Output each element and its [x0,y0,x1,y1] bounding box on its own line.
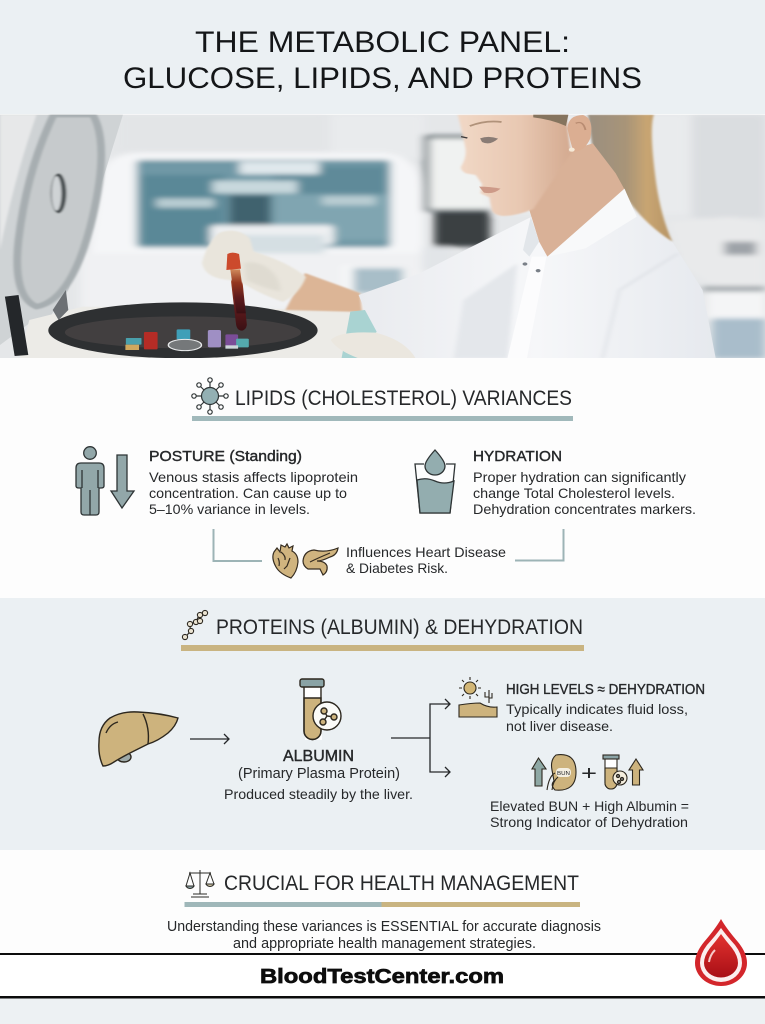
icon: desert sun [459,677,497,717]
text: disease risk: & Diabetes Risk. [346,560,448,576]
icon: BUN plus albumin [532,755,643,790]
icon: heart [273,544,298,578]
title: THE METABOLIC PANEL: [195,26,570,59]
icon: pancreas [303,548,338,575]
icon: protein chain [182,610,208,640]
icon: glass of water with drop [415,450,455,513]
photo: lab technician placing a blood tube in a centrifuge [0,114,765,358]
panel: crucial for health management [167,870,601,952]
bottom band [0,997,765,1024]
text: bun and albumin: Strong Indicator of Dehydration [490,814,688,830]
table [28,307,106,324]
text: hydration: HYDRATION [473,448,562,465]
icon: small tube [603,755,627,789]
text: high levels: not liver disease. [506,718,613,734]
text: high levels [506,682,705,734]
mouth [479,187,501,193]
icon: standing person with down arrow [76,447,134,515]
footer site name: BloodTestCenter.com [260,966,504,988]
text: posture: POSTURE (Standing) [149,448,302,465]
text: disease risk [346,544,506,576]
connector right [515,529,564,560]
heading: proteins: PROTEINS (ALBUMIN) & DEHYDRATION [216,616,583,639]
text: summary: Understanding these variances is ESSENTIAL for accurate diagnosis [167,919,601,935]
hand with glove [202,231,306,302]
icon: liver [99,712,178,766]
heading rule [192,416,573,421]
text: posture: Venous stasis affects lipoprotein [149,469,358,485]
collar [547,189,637,257]
title: GLUCOSE, LIPIDS, AND PROTEINS [123,62,642,95]
blood tube lower [230,279,247,331]
header band [0,0,765,114]
ear [567,115,591,152]
lipids section background [0,358,765,598]
connector left [214,529,262,561]
coat [358,216,716,358]
text: albumin [224,748,413,802]
text: posture: 5–10% variance in levels. [149,501,310,517]
lid [0,115,123,345]
heading rule [181,645,584,651]
text: posture [149,448,358,517]
icon: up arrow tan [629,759,643,785]
band under photo [0,358,765,370]
panel: lipids variances [76,378,696,578]
text: albumin: Produced steadily by the liver. [224,786,413,802]
eye [480,137,498,143]
tube cap and upper tube [230,269,246,313]
text: hydration: Dehydration concentrates markers. [473,501,696,517]
health management section background [0,850,765,954]
proteins section background [0,598,765,850]
text: disease risk: Influences Heart Disease [346,544,506,560]
icon: lipid particle [192,378,228,414]
heading: lipids: LIPIDS (CHOLESTEROL) VARIANCES [235,387,572,410]
plus sign: + [581,763,597,785]
heading: crucial: CRUCIAL FOR HEALTH MANAGEMENT [224,872,579,895]
text: summary: and appropriate health management strategies. [233,936,536,952]
footer [0,919,765,998]
text: summary [167,919,601,952]
heading rule [184,902,580,907]
icon: kidney: BUN [557,771,570,777]
icon: up arrow green [532,758,546,786]
text: bun and albumin: Elevated BUN + High Albumin = [490,798,689,814]
text: high levels: HIGH LEVELS ≈ DEHYDRATION [506,682,705,698]
text: bun and albumin [490,798,689,830]
arm [285,273,362,312]
cloth and lower glove [342,310,377,358]
neck [529,143,624,257]
footer background [0,954,765,997]
hair [588,115,672,242]
text: posture: concentration. Can cause up to [149,485,347,501]
arrow: liver to albumin [190,734,229,744]
face [458,115,571,216]
text: albumin: ALBUMIN [283,748,354,765]
text: hydration: Proper hydration can significantly [473,469,686,485]
title [123,26,642,95]
centrifuge rim [48,302,318,358]
text: albumin: (Primary Plasma Protein) [238,766,400,782]
text: hydration: change Total Cholesterol levels. [473,485,675,501]
text: hydration [473,448,696,517]
icon: albumin test tube [300,679,341,740]
icon: balance scale [186,870,214,897]
text: high levels: Typically indicates fluid loss, [506,701,688,717]
panel: proteins and dehydration [99,610,705,830]
icon: blood drop logo [695,919,747,986]
sample tubes [125,329,249,351]
arrow: branching connector [391,699,450,777]
